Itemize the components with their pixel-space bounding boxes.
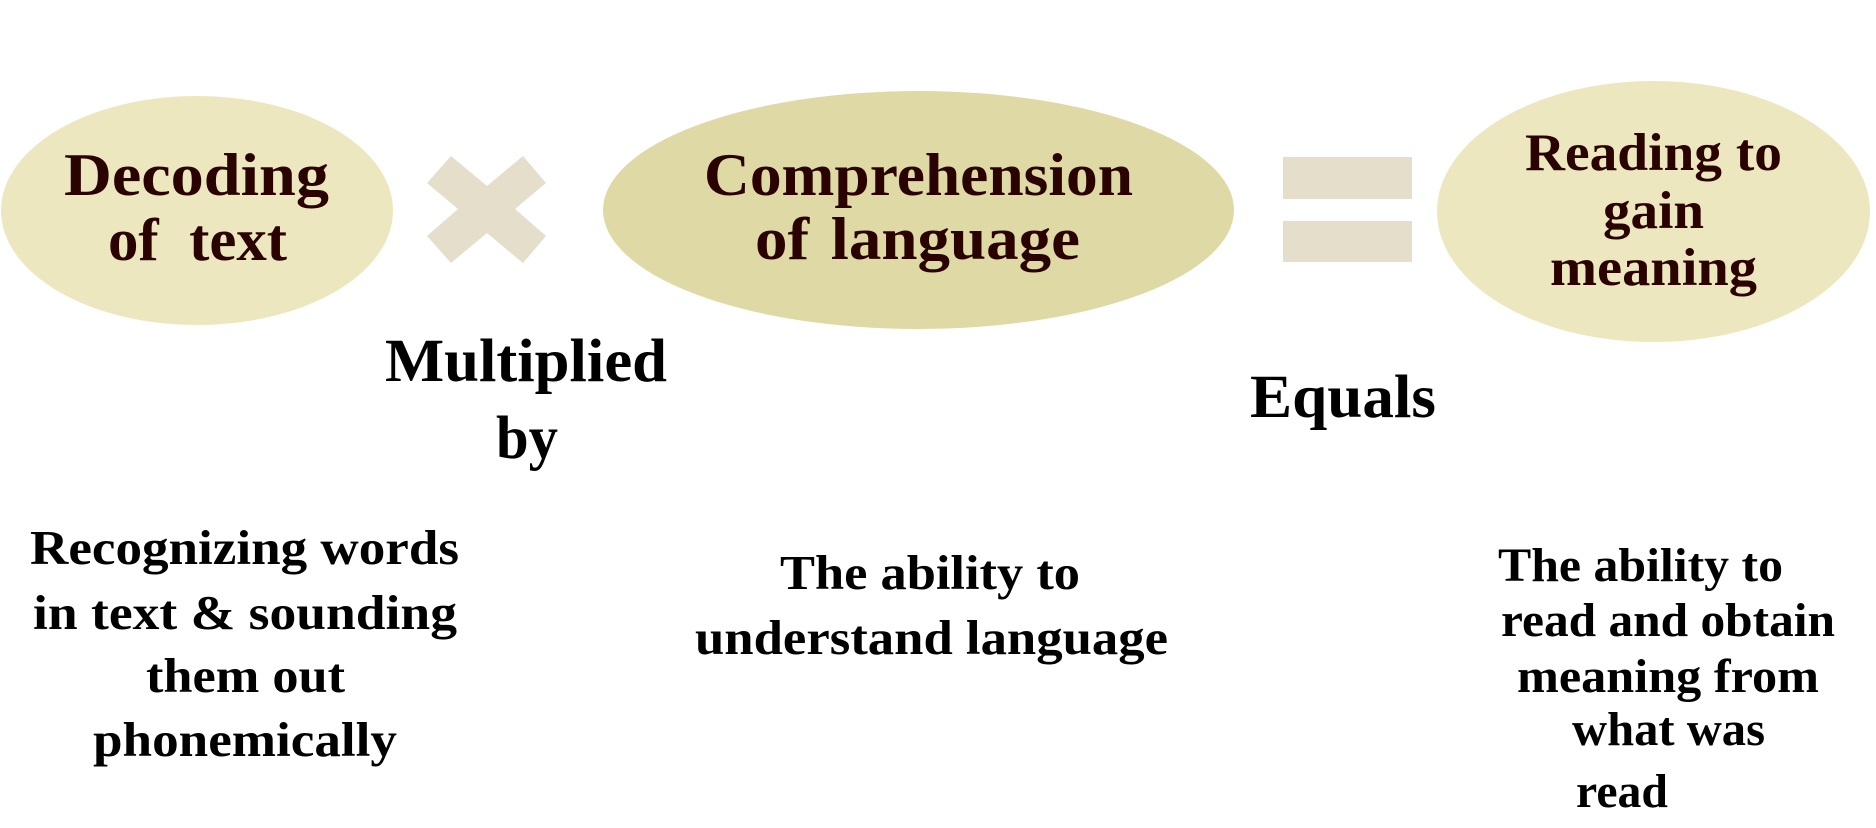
text block: decoding description: in text & sounding (33, 585, 458, 640)
text block: comprehension description: The ability to (780, 545, 1080, 600)
icon: multiplication sign (427, 156, 546, 263)
text block: comprehension description: understand language (695, 610, 1168, 665)
ellipse: decoding of text (1, 96, 393, 325)
text block: comprehension description (695, 545, 1168, 665)
label: multiplied by: Multiplied (385, 328, 667, 395)
text block: reading description: what was (1572, 703, 1765, 756)
text block: decoding description (30, 520, 459, 767)
ellipse: decoding of text: Decoding (64, 142, 329, 208)
text block: reading description (1498, 539, 1835, 818)
text block: reading description: meaning from (1517, 650, 1819, 703)
label: equals: Equals (1250, 364, 1436, 431)
ellipse: reading to gain meaning: meaning (1550, 239, 1757, 297)
icon: equals sign (1283, 157, 1412, 262)
text block: decoding description: Recognizing words (30, 520, 459, 575)
text block: reading description: read and obtain (1501, 594, 1835, 647)
ellipse: comprehension of language: of language (755, 206, 1080, 272)
text block: reading description: read (1576, 765, 1668, 818)
ellipse: reading to gain meaning: gain (1603, 182, 1704, 240)
label: multiplied by: by (496, 405, 558, 472)
text block: decoding description: phonemically (93, 712, 398, 767)
text block: decoding description: them out (146, 648, 346, 703)
ellipse: comprehension of language (603, 91, 1234, 329)
ellipse: comprehension of language: Comprehension (704, 142, 1133, 208)
ellipse: decoding of text: of text (108, 207, 287, 273)
ellipse: reading to gain meaning: Reading to (1525, 124, 1782, 182)
ellipse: reading to gain meaning (1437, 81, 1870, 342)
label: multiplied by (385, 328, 667, 472)
text block: reading description: The ability to (1498, 539, 1783, 592)
